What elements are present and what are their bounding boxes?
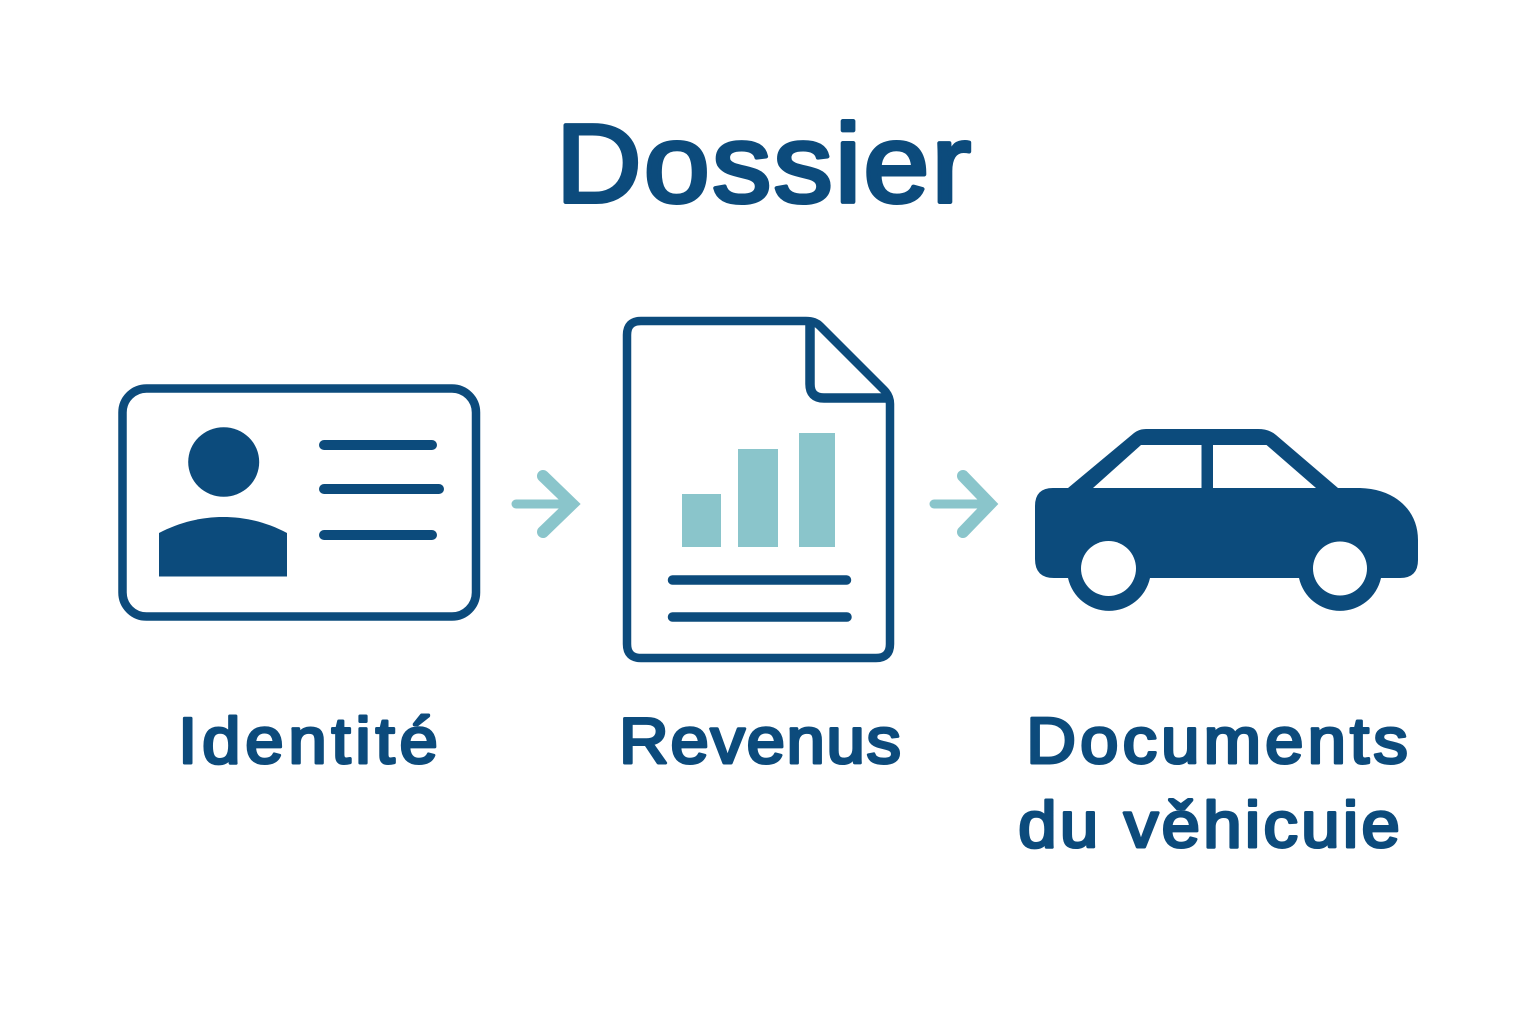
icon: identity card xyxy=(122,388,476,616)
arrow: identity to income xyxy=(516,476,572,532)
title: Dossier xyxy=(556,103,971,226)
icon: income document xyxy=(627,321,890,658)
label: vehicle documents: Documents xyxy=(1026,705,1408,778)
label: vehicle documents xyxy=(1018,705,1408,862)
label: vehicle documents: du věhicuie xyxy=(1018,789,1400,862)
arrow: income to vehicle xyxy=(934,476,990,532)
label: income: Revenus xyxy=(619,705,901,778)
icon: car xyxy=(1035,429,1418,611)
label: identity: Identité xyxy=(178,705,438,778)
